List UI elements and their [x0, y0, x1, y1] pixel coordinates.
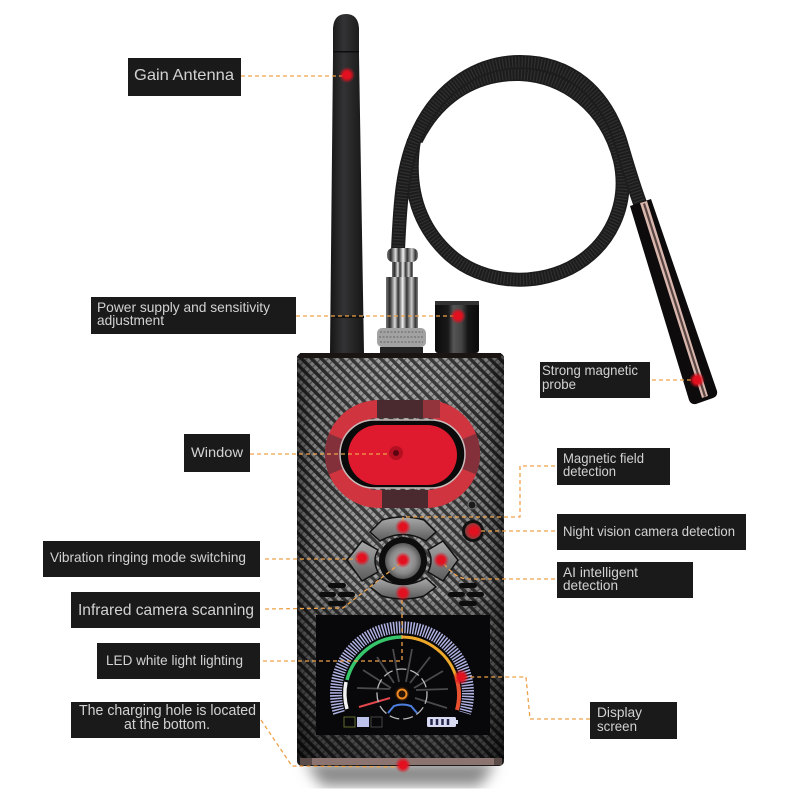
needle spokes	[357, 649, 448, 708]
blue arc	[388, 704, 417, 713]
label: Night vision camera detection: Night vision camera detection	[563, 523, 735, 539]
label: LED white light lighting: LED white light lighting	[106, 652, 243, 668]
device body	[297, 353, 504, 766]
tick scale	[336, 627, 468, 713]
label: Power supply and sensitivity adjustment: Power supply and sensitivity	[97, 299, 270, 315]
magnetic probe cable	[398, 62, 641, 280]
label: charging hole: at the bottom.	[124, 717, 210, 733]
drop shadow under device	[305, 762, 496, 786]
sensitivity knob	[435, 301, 479, 353]
label: Strong magnetic probe	[540, 362, 650, 398]
label: Window	[184, 434, 250, 472]
label: AI intelligent detection: AI intelligent	[563, 564, 638, 580]
label: Magnetic field detection: detection	[563, 463, 616, 479]
label: charging hole	[71, 702, 260, 738]
label: Power supply and sensitivity adjustment	[91, 297, 296, 334]
antenna	[330, 14, 364, 353]
battery icon	[427, 717, 458, 727]
magnetic probe	[630, 199, 717, 404]
aviation connector	[377, 248, 426, 353]
white arc	[345, 682, 347, 709]
control buttons	[347, 501, 484, 599]
status icons	[344, 717, 382, 727]
label: Infrared camera scanning: Infrared camera scanning	[78, 602, 254, 619]
label: charging hole: The charging hole is located	[79, 703, 256, 719]
orange arc	[402, 637, 457, 680]
device illustration	[297, 14, 717, 786]
gauge hub	[395, 687, 409, 701]
label: Display screen: Display	[597, 704, 642, 720]
detection window	[334, 409, 471, 499]
display screen	[316, 615, 490, 735]
label: Magnetic field detection	[557, 448, 670, 485]
label: Gain Antenna: Gain Antenna	[134, 67, 234, 84]
leader lines	[241, 76, 694, 767]
callout markers	[339, 67, 705, 773]
label: LED white light lighting	[97, 643, 260, 679]
label: Power supply and sensitivity adjustment: adjustment	[97, 312, 164, 328]
green arc	[347, 637, 402, 680]
label: Gain Antenna	[128, 58, 241, 96]
label: AI intelligent detection: detection	[563, 577, 618, 593]
red needle	[359, 698, 390, 707]
label: Night vision camera detection	[557, 514, 746, 550]
label: Display screen: screen	[597, 718, 637, 734]
label: Vibration ringing mode switching: Vibration ringing mode switching	[50, 549, 246, 565]
label: Magnetic field detection: Magnetic field	[563, 450, 644, 466]
label: Strong magnetic probe: probe	[542, 376, 576, 392]
speaker slots	[319, 583, 484, 606]
label: Vibration ringing mode switching	[43, 541, 260, 577]
red arc	[457, 680, 459, 710]
label: Strong magnetic probe: Strong magnetic	[542, 362, 638, 378]
label: Display screen	[590, 702, 677, 739]
label: Infrared camera scanning	[71, 592, 260, 628]
label: AI intelligent detection	[557, 562, 693, 598]
label: Window: Window	[191, 444, 244, 460]
inner dashed ring	[377, 669, 427, 719]
